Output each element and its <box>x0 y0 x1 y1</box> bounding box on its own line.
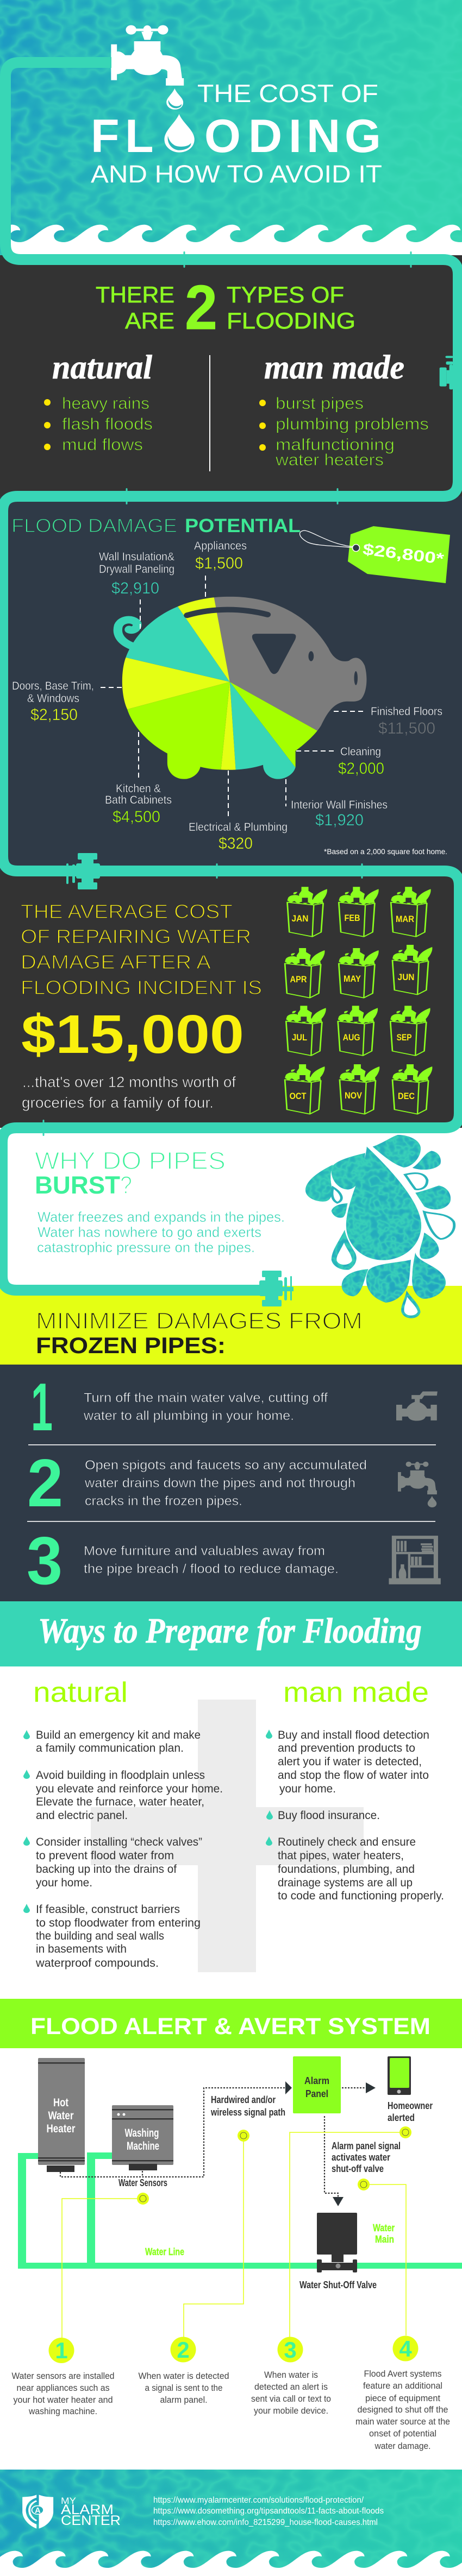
column: man made: that pipes, water heaters, <box>278 1849 404 1862</box>
step 4 callout: onset of potential <box>369 2428 436 2439</box>
label: doors: & Windows <box>27 692 79 705</box>
panel: footer <box>0 2470 462 2576</box>
panel: prepare lists <box>0 1666 462 1999</box>
column: natural <box>23 1677 223 1969</box>
step 2 callout: 2 <box>177 2337 190 2363</box>
footer water background <box>0 2470 462 2576</box>
label: finished floors: Finished Floors <box>371 705 442 718</box>
step 1 callout: your hot water heater and <box>13 2395 113 2405</box>
step 2 callout <box>138 2337 229 2405</box>
pie chart: piggy bank <box>113 596 366 779</box>
step 1: Turn off the main water valve, cutting off <box>84 1391 328 1405</box>
banner background <box>0 1286 462 1365</box>
step 3 callout: 3 <box>284 2337 297 2363</box>
text: why pipes burst <box>37 1209 285 1255</box>
column: natural: Consider installing “check valves” <box>36 1836 202 1848</box>
heading: why do pipes burst: ? <box>120 1171 132 1199</box>
step 4 callout: designed to shut off the <box>358 2404 448 2415</box>
price tag <box>300 526 450 583</box>
appliance: hot water heater: Heater <box>47 2123 75 2135</box>
heading: why do pipes burst: BURST <box>35 1171 120 1199</box>
panel background <box>0 1128 462 1286</box>
panel background <box>0 496 462 871</box>
step 1 callout: Water sensors are installed <box>12 2371 114 2381</box>
step 1 callout: 1 <box>55 2338 68 2363</box>
label: valve signal: Alarm panel signal <box>332 2141 401 2151</box>
label: valve signal <box>332 2141 401 2174</box>
pig tail <box>118 620 137 646</box>
appliance: hot water heater: Hot <box>53 2097 68 2109</box>
step 3: 3 <box>27 1524 63 1599</box>
background plus sign <box>91 1700 364 1972</box>
label: wall insulation: Wall Insulation& <box>99 551 174 563</box>
text: groceries comparison <box>22 1074 236 1111</box>
appliance: washing machine: Machine <box>127 2140 159 2152</box>
heading: why do pipes burst: WHY DO PIPES <box>35 1147 226 1175</box>
column: natural: Avoid building in floodplain unless <box>36 1769 205 1782</box>
step 1: 1 <box>31 1370 53 1445</box>
price tag: $26,800* <box>361 541 445 568</box>
callout markers <box>137 2126 411 2205</box>
source urls <box>153 2496 384 2527</box>
column: man made: man made <box>283 1677 429 1708</box>
logo: my alarm center: MY <box>61 2496 76 2506</box>
heading: there are 2 types: 2 <box>185 272 217 343</box>
icon grid: grocery bags by month: OCT <box>289 1091 307 1101</box>
step 2: water drains down the pipes and not through <box>84 1476 355 1491</box>
callout lines <box>62 2132 406 2338</box>
column: natural types: flash floods <box>62 414 153 433</box>
label: doors: $2,150 <box>30 706 78 724</box>
column: natural types: heavy rains <box>62 394 149 413</box>
step 4 callout <box>355 2336 450 2451</box>
column: natural: in basements with <box>36 1943 127 1955</box>
label: water main: Water <box>373 2223 395 2233</box>
column: man made types <box>259 349 429 469</box>
alarm panel: Panel <box>305 2088 328 2099</box>
column: man made types: malfunctioning <box>276 435 395 454</box>
column: man made: and prevention products to <box>278 1742 415 1754</box>
column: man made: Routinely check and ensure <box>278 1836 416 1848</box>
text: average cost: THE AVERAGE COST <box>21 900 233 923</box>
logo: my alarm center: CENTER <box>61 2513 121 2528</box>
label: cleaning <box>338 746 384 778</box>
column: man made: and stop the flow of water into <box>278 1769 429 1782</box>
panel: average cost of repair <box>0 871 462 1128</box>
alarm panel <box>293 2056 341 2113</box>
label: water sensors: Water Sensors <box>118 2177 167 2188</box>
column: man made: Buy flood insurance. <box>278 1809 380 1822</box>
bullet drops <box>266 1729 273 1846</box>
column: man made: foundations, plumbing, and <box>278 1863 415 1876</box>
step 3 callout <box>251 2337 331 2416</box>
label: kitchen <box>105 782 172 826</box>
icon grid: grocery bags by month: JAN <box>291 913 309 924</box>
column: natural: a family communication plan. <box>36 1742 184 1754</box>
arrow: alarm to phone <box>342 2082 376 2093</box>
valve: lower left <box>66 853 100 889</box>
banner: ways to prepare <box>0 1601 462 1666</box>
column: man made: Buy and install flood detection <box>278 1729 429 1741</box>
column: natural: waterproof compounds. <box>35 1957 159 1969</box>
water shut-off valve <box>299 2213 377 2290</box>
column: natural types: natural <box>52 349 153 386</box>
step 2: 2 <box>27 1446 63 1521</box>
valve: burst pipe end <box>259 1271 294 1306</box>
valve: right side <box>440 356 453 389</box>
appliance: hot water heater: Water <box>48 2110 74 2122</box>
banner: flood alert system: FLOOD ALERT & AVERT SYSTEM <box>30 2013 430 2040</box>
label: cleaning: $2,000 <box>338 760 384 778</box>
label: kitchen: Bath Cabinets <box>105 794 172 806</box>
label: wall insulation: $2,910 <box>111 579 159 597</box>
column: natural: natural <box>33 1677 128 1708</box>
panel: two types of flooding <box>0 255 462 496</box>
label: doors <box>12 680 94 724</box>
label: finished floors: $11,500 <box>378 719 435 737</box>
step 3: Move furniture and valuables away from <box>84 1544 325 1558</box>
label: wall insulation <box>99 551 174 597</box>
icon: shut-off valve <box>396 1391 438 1421</box>
heading: there are 2 types: ARE <box>125 308 174 333</box>
step 2 callout: alarm panel. <box>160 2395 208 2405</box>
label: water main <box>373 2223 395 2245</box>
label: homeowner alerted <box>388 2100 433 2123</box>
icon grid: grocery bags by month: AUG <box>343 1032 360 1043</box>
column: natural: Elevate the furnace, water heater, <box>36 1796 204 1808</box>
heading: there are 2 types: TYPES OF <box>227 282 344 307</box>
title <box>91 79 382 188</box>
arrow: alarm to valve <box>324 2116 344 2206</box>
column: man made types: water heaters <box>275 450 384 469</box>
heading: MINIMIZE DAMAGES FROM <box>36 1308 363 1334</box>
title: AND HOW TO AVOID IT <box>91 160 382 188</box>
panel: flood alert diagram <box>0 2048 462 2470</box>
appliance: washing machine: Washing <box>125 2127 159 2139</box>
pipe system <box>2 62 459 1306</box>
big number: $15,000: $15,000 <box>21 1004 244 1065</box>
step 4 callout: main water source at the <box>355 2416 450 2427</box>
logo: my alarm center: A <box>35 2506 41 2515</box>
step 1 callout: near appliances such as <box>16 2383 110 2393</box>
label: wall insulation: Drywall Paneling <box>99 563 174 576</box>
label: interior wall: Interior Wall Finishes <box>291 799 388 811</box>
column: natural types: mud flows <box>62 435 143 454</box>
water line <box>18 2152 462 2269</box>
column: man made: to code and functioning properly. <box>278 1890 444 1902</box>
step 2 callout: When water is detected <box>138 2371 229 2381</box>
column: man made: alert you if water is detected, <box>278 1756 422 1768</box>
label: interior wall <box>291 799 388 829</box>
icon: dripping faucet <box>398 1462 437 1507</box>
panel: flood damage potential <box>0 496 462 871</box>
icon grid: grocery bags by month: APR <box>290 974 307 984</box>
icon grid: grocery bags by month: DEC <box>398 1091 415 1101</box>
label: finished floors <box>371 705 442 737</box>
label: electrical: Electrical & Plumbing <box>189 821 288 834</box>
text: why pipes burst: catastrophic pressure on the pipes. <box>37 1239 255 1255</box>
icon grid: grocery bags by month: MAR <box>396 914 414 924</box>
pipe joints <box>42 251 412 1136</box>
leader lines <box>101 576 364 817</box>
step 4 callout: Flood Avert systems <box>364 2369 441 2379</box>
panel: hero <box>0 0 462 255</box>
heading: there are 2 types: THERE <box>96 282 174 307</box>
icon grid: grocery bags by month: JUL <box>292 1032 307 1043</box>
heading: POTENTIAL <box>185 515 301 536</box>
step 1 <box>31 1370 328 1445</box>
label: valve signal: activates water <box>332 2152 390 2163</box>
step 4 callout: piece of equipment <box>365 2393 440 2403</box>
column: man made: your home. <box>279 1783 336 1795</box>
arrow: sensor signal path <box>60 2081 292 2177</box>
panel background <box>0 871 462 1128</box>
step 3 callout: When water is <box>264 2370 318 2380</box>
heading <box>11 515 301 536</box>
text: average cost: FLOODING INCIDENT IS <box>21 976 262 999</box>
label: appliances: Appliances <box>194 540 247 552</box>
panel background <box>0 2048 462 2470</box>
panel background <box>0 1365 462 1601</box>
column: man made: drainage systems are all up <box>278 1877 413 1889</box>
column: man made types: burst pipes <box>276 394 364 413</box>
column: natural: the building and seal walls <box>36 1930 164 1942</box>
panel: why do pipes burst <box>0 1128 462 1286</box>
illustration: bursting water drops <box>305 1135 455 1318</box>
pig slot, ear, eye, nostril <box>187 610 358 685</box>
label: kitchen: $4,500 <box>113 808 160 826</box>
panel: minimize damages heading <box>0 1286 462 1365</box>
appliance: washing machine <box>112 2105 173 2170</box>
column: man made types: man made <box>264 349 404 386</box>
title: THE COST OF <box>197 79 378 108</box>
column: natural: to stop floodwater from entering <box>36 1917 201 1929</box>
hero water background <box>0 0 462 255</box>
label: cleaning: Cleaning <box>340 746 381 758</box>
label: interior wall: $1,920 <box>315 811 364 829</box>
text: groceries comparison: ...that's over 12 months worth of <box>22 1074 236 1090</box>
column: man made <box>266 1677 444 1902</box>
step 1: water to all plumbing in your home. <box>83 1409 294 1423</box>
step 2 callout: a signal is sent to the <box>145 2383 223 2393</box>
icon grid: grocery bags by month: JUN <box>398 972 414 982</box>
text: why pipes burst: Water freezes and expands in the pipes. <box>38 1209 285 1225</box>
label: kitchen: Kitchen & <box>116 782 161 795</box>
column: man made types: plumbing problems <box>276 414 429 433</box>
source urls: https://www.dosomething.org/tipsandtools/11-facts-about-floods <box>153 2506 384 2516</box>
panel background <box>0 255 462 496</box>
step 3 callout: detected an alert is <box>254 2382 328 2392</box>
step 4 callout: water damage. <box>374 2441 430 2451</box>
label: appliances <box>194 540 247 572</box>
step 3 callout: your mobile device. <box>254 2405 328 2416</box>
text: average cost: DAMAGE AFTER A <box>21 951 211 973</box>
column: natural: and electric panel. <box>36 1809 128 1822</box>
step 2 <box>27 1446 367 1521</box>
hero wave band <box>11 224 462 255</box>
column: natural types <box>44 349 153 454</box>
heading: there are 2 types: FLOODING <box>227 308 355 333</box>
icon: water drop in title <box>164 114 195 153</box>
icon grid: grocery bags by month: NOV <box>345 1090 363 1101</box>
heading: why do pipes burst <box>35 1147 226 1199</box>
label: doors: Doors, Base Trim, <box>12 680 94 692</box>
source urls: https://www.ehow.com/info_8215299_house-flood-causes.html <box>153 2518 378 2527</box>
icon grid: grocery bags by month <box>285 887 432 1114</box>
heading: FROZEN PIPES: <box>36 1333 226 1358</box>
column: natural: backing up into the drains of <box>36 1863 177 1876</box>
label: water main: Main <box>375 2234 394 2245</box>
label: appliances: $1,500 <box>195 554 243 572</box>
label: homeowner alerted: Homeowner <box>388 2100 433 2111</box>
step 3: the pipe breach / flood to reduce damage. <box>84 1562 339 1576</box>
text: average cost <box>21 900 262 999</box>
label: signal path: Hardwired and/or <box>211 2094 276 2105</box>
step 4 callout: 4 <box>399 2336 412 2362</box>
icon grid: grocery bags by month: FEB <box>345 913 360 923</box>
pipe run <box>2 62 459 1290</box>
icon grid: grocery bags by month: MAY <box>344 974 361 984</box>
column: natural: your home. <box>36 1877 92 1889</box>
banner: flood alert system <box>0 1999 462 2048</box>
bullet drops <box>23 1730 30 1913</box>
label: electrical <box>189 821 288 853</box>
step 2: Open spigots and faucets so any accumulated <box>85 1458 367 1473</box>
icon: bookshelf <box>389 1536 441 1584</box>
label: homeowner alerted: alerted <box>388 2112 415 2123</box>
label: signal path <box>210 2094 285 2118</box>
step 4 callout: feature an additional <box>363 2381 442 2391</box>
icon grid: grocery bags by month: SEP <box>397 1032 412 1043</box>
text: why pipes burst: Water has nowhere to go and exerts <box>38 1224 261 1240</box>
footnote: *Based on a 2,000 square foot home. <box>324 847 447 856</box>
logo: my alarm center: ALARM <box>61 2502 114 2517</box>
appliance: hot water heater <box>38 2058 85 2172</box>
heading: FLOOD DAMAGE <box>11 515 177 536</box>
step 3 callout: sent via call or text to <box>251 2394 331 2404</box>
step 1 callout: washing machine. <box>28 2406 97 2416</box>
heading <box>36 1308 363 1358</box>
footer waves <box>0 2550 462 2576</box>
logo: my alarm center <box>22 2495 121 2529</box>
column: natural: you elevate and reinforce your home. <box>36 1783 223 1795</box>
alarm panel: Alarm <box>304 2075 329 2086</box>
label: signal path: wireless signal path <box>210 2107 285 2118</box>
step 1 callout <box>12 2338 114 2416</box>
step 2: cracks in the frozen pipes. <box>85 1494 242 1508</box>
source urls: https://www.myalarmcenter.com/solutions/flood-protection/ <box>153 2496 364 2505</box>
text: groceries comparison: groceries for a family of four. <box>22 1094 214 1111</box>
heading: there are 2 types <box>96 272 355 343</box>
column: natural: Build an emergency kit and make <box>36 1729 201 1741</box>
panel background <box>0 1666 462 1999</box>
label: valve signal: shut-off valve <box>332 2163 384 2174</box>
text: average cost: OF REPAIRING WATER <box>21 925 251 948</box>
water line: Water Line <box>145 2246 184 2257</box>
water shut-off valve: Water Shut-Off Valve <box>299 2280 377 2290</box>
title: FLOODING <box>91 110 381 162</box>
column: natural: to prevent flood water from <box>36 1849 174 1862</box>
column: natural: If feasible, construct barriers <box>36 1903 180 1916</box>
icon: faucet <box>111 25 184 110</box>
icon: phone <box>388 2056 411 2095</box>
label: electrical: $320 <box>218 835 253 853</box>
step 3 <box>27 1524 339 1599</box>
panel: frozen pipe steps <box>0 1365 462 1601</box>
